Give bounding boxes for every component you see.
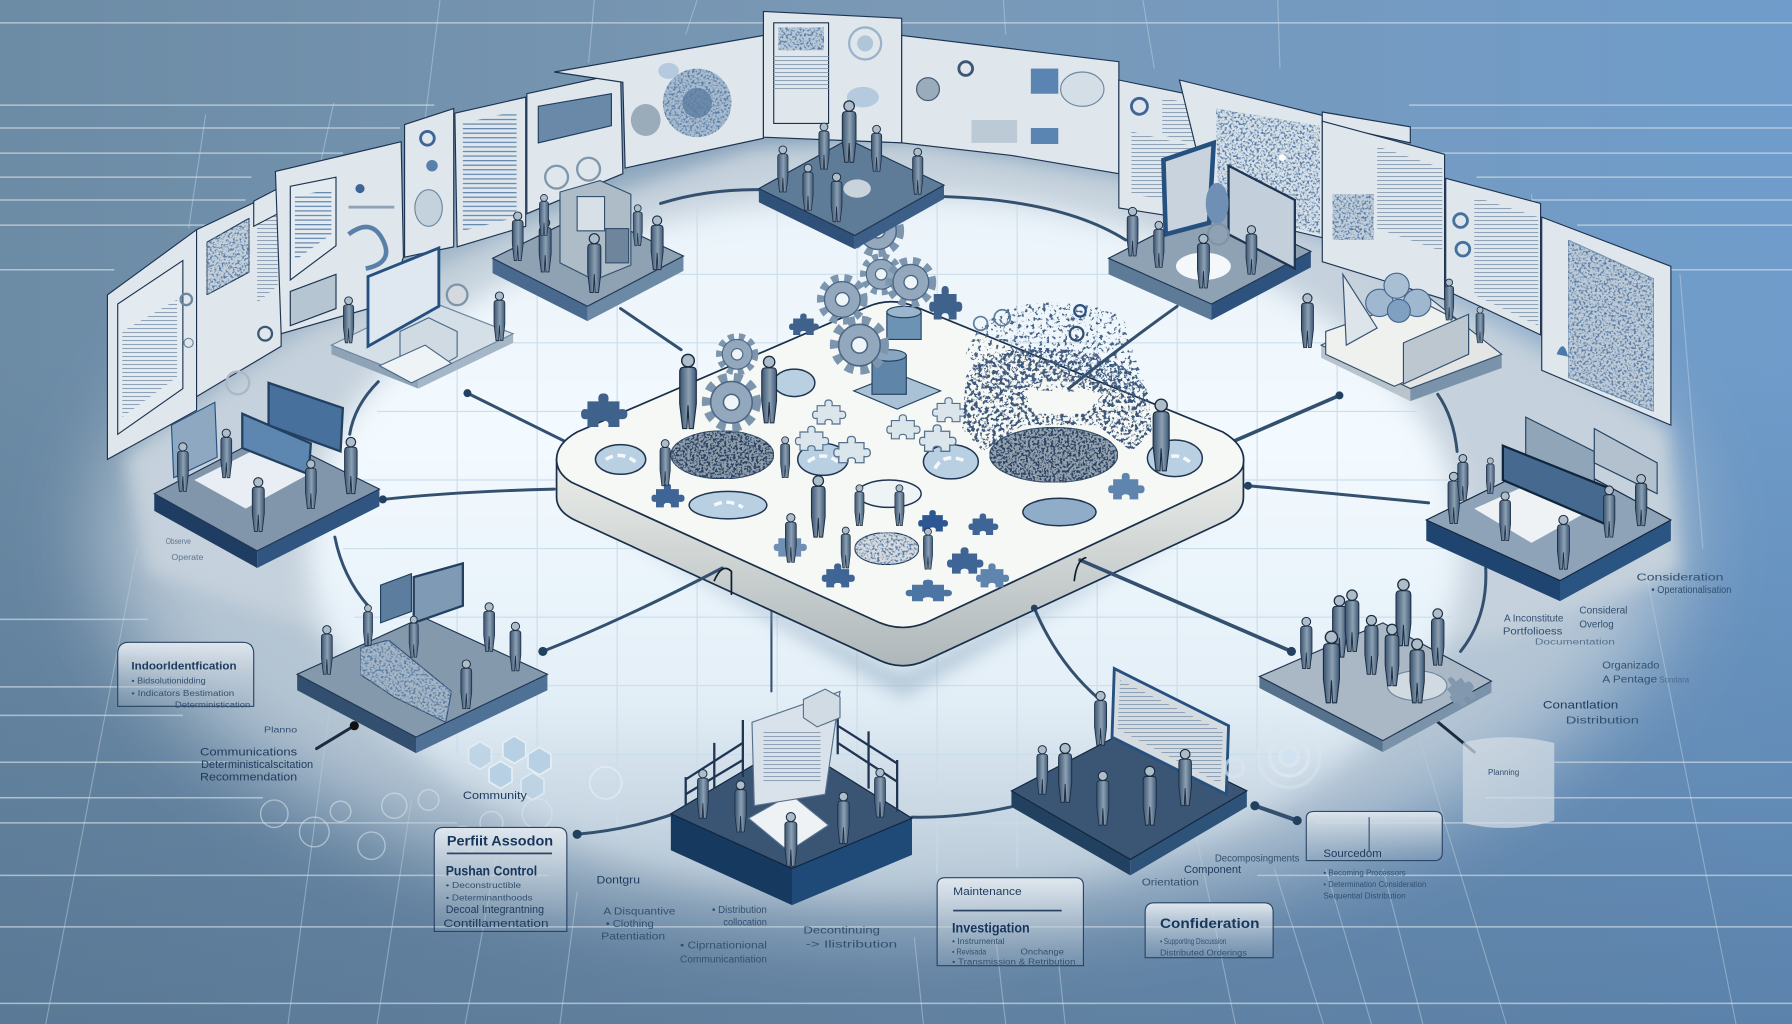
text panel: identification: Deterministication — [175, 700, 250, 709]
label: component notes — [1142, 854, 1299, 889]
label: community: Community — [463, 790, 527, 802]
text block: lower notes: • Clothing — [606, 919, 654, 930]
people on platform — [660, 354, 1169, 569]
label: observe notes: Observe — [166, 537, 191, 546]
central cylinders — [854, 306, 941, 409]
label: observe notes — [166, 537, 204, 562]
station: bottom right big screen — [1011, 669, 1247, 875]
text panel: sourcedom: • Determination Consideration — [1323, 880, 1426, 889]
white swirls inside ovals — [606, 455, 1190, 507]
text panel: perfect association: • Deconstructible — [446, 881, 522, 890]
station: lower left servers — [297, 563, 547, 753]
document: diagrams — [275, 142, 403, 334]
text block: right notes: Consideration — [1637, 573, 1724, 584]
document: notes sheet — [107, 230, 197, 459]
text panel: sourcedom: • Becoming Processors — [1323, 868, 1406, 877]
text block: right notes: Overlog — [1579, 619, 1614, 630]
icon: faint network behind lower left — [261, 790, 552, 859]
text panel: maintenance: Maintenance — [953, 886, 1022, 898]
station: top centre — [759, 101, 944, 249]
puzzle pieces on platform — [651, 473, 1145, 601]
text panel: sourcedom — [1306, 811, 1442, 900]
text block: right notes: A Pentage — [1602, 674, 1657, 685]
text block: right notes — [1503, 573, 1732, 726]
text block: lower notes: Patentiation — [601, 931, 665, 942]
document: long radial diagram — [554, 35, 763, 168]
connectors attached to platform side — [543, 306, 1291, 699]
text block: lower notes: collocation — [723, 918, 767, 929]
text panel: confideration: • Supporting Discussion — [1160, 937, 1226, 946]
text panel: perfect association: Pushan Control — [446, 863, 537, 878]
text block: lower notes: A Disquantive — [603, 906, 676, 917]
text block: right notes: Portfolioess — [1503, 626, 1562, 637]
speckled disc small — [855, 533, 919, 565]
speckled ground strip behind the floor — [126, 143, 1680, 640]
text block: right notes: Documentation — [1535, 638, 1615, 647]
label: component notes: Orientation — [1142, 878, 1199, 889]
station: right printer with spheres — [1301, 273, 1502, 401]
document: sketches — [197, 190, 281, 397]
text block: lower notes: Dontgru — [597, 874, 640, 886]
station: right monitors — [1426, 417, 1671, 601]
connectors between stations — [317, 190, 1486, 834]
outer soft haze — [103, 160, 1680, 914]
text panel: perfect association: Perfiit Assodon — [447, 834, 553, 849]
text block: communications: Communications — [200, 746, 297, 758]
station: top right tablet and monitor — [1109, 143, 1311, 320]
text panel: perfect association — [434, 827, 567, 931]
pale puzzle ring at centre — [795, 398, 966, 463]
speckled disc left — [671, 431, 774, 479]
pale circular floor — [309, 194, 1463, 898]
text block: communications: Deterministicalscitation — [201, 759, 313, 771]
callout: planning cup: Planning — [1488, 768, 1519, 777]
station: right lower crowd — [1259, 579, 1491, 752]
text panel: maintenance: Onchange — [1021, 947, 1065, 956]
text panel: confideration: Confideration — [1160, 916, 1259, 931]
text block: lower notes — [597, 874, 898, 965]
text block: right notes: Distribution — [1566, 715, 1639, 726]
central platform shadow — [571, 503, 1234, 697]
text block: lower notes: Decontinuing — [803, 926, 880, 937]
label: component notes: Decomposingments — [1215, 854, 1299, 865]
text panel: confideration: Distributed Orderings — [1160, 948, 1247, 957]
document: back sheet right — [1322, 112, 1410, 143]
connector end dots — [350, 389, 1343, 839]
floor grid — [331, 189, 1463, 874]
text block: communications: Planno — [264, 726, 298, 735]
document: icon column — [405, 109, 454, 257]
text panel: identification: • Bidsolutionidding — [131, 676, 206, 685]
text block: lower notes: -> Ilistribution — [806, 939, 898, 950]
text panel: identification: Indoorldentfication — [131, 661, 237, 673]
speckled disc right — [990, 427, 1118, 482]
text block: lower notes: Communicantiation — [680, 954, 767, 965]
blue map ovals — [595, 369, 1202, 526]
text block: right notes: Sondara — [1659, 675, 1690, 684]
text panel: confideration — [1145, 903, 1273, 958]
text panel: identification: • Indicators Bestimation — [131, 689, 234, 698]
document: text and circle — [1119, 80, 1214, 229]
gears above platform — [707, 209, 931, 426]
text block: communications: Recommendation — [200, 772, 297, 784]
document: cloud and blocks — [902, 35, 1119, 174]
document: network map — [1179, 80, 1322, 238]
text panel: sourcedom: Sequential Distribution — [1323, 891, 1406, 900]
document: striped text sheet — [455, 97, 526, 247]
document: back sheet — [254, 158, 337, 226]
text block: lower notes: • Distribution — [712, 905, 767, 916]
dots of platform connectors — [538, 605, 1296, 656]
text block: right notes: • Operationalisation — [1651, 585, 1732, 596]
text block: right notes: Organizado — [1602, 661, 1660, 672]
document: data grid — [1542, 217, 1671, 425]
station: bottom centre chart and railing — [671, 689, 912, 905]
text panel: maintenance — [937, 878, 1083, 967]
text block: right notes: A Inconstitute — [1504, 614, 1564, 625]
text panel: maintenance: Investigation — [952, 921, 1030, 936]
station: left pale monitor — [331, 248, 513, 389]
station: left monitors — [154, 371, 379, 568]
text panel: perfect association: Decoal Integrantning — [446, 904, 544, 916]
document: three-panel chart — [763, 11, 902, 143]
station: top left people with boxes — [493, 181, 683, 321]
text block: communications — [200, 726, 313, 784]
text block: right notes: Conantlation — [1543, 700, 1618, 712]
callout: planning cup — [1463, 737, 1554, 828]
document: dashboard sheet — [527, 73, 623, 214]
text panel: maintenance: • Revisada — [952, 947, 987, 956]
text block: lower notes: • Ciprnationional — [680, 941, 767, 952]
paper wall of documents — [107, 11, 1671, 459]
icon: target rings — [1225, 726, 1320, 787]
text panel: maintenance: • Transmission & Retribution — [952, 958, 1075, 967]
document: rings and text — [1446, 178, 1541, 335]
icon: hexagon cluster — [469, 736, 622, 800]
text panel: maintenance: • Instrumental — [952, 937, 1005, 946]
text panel: perfect association: Contillamentation — [443, 918, 549, 930]
swarm of small particles — [962, 303, 1152, 451]
floating puzzle pieces — [581, 286, 962, 427]
text panel: identification — [118, 642, 254, 709]
document: data sheet — [1322, 121, 1445, 299]
text panel: sourcedom: Sourcedom — [1323, 848, 1382, 860]
text panel: perfect association: • Determinanthoods — [446, 894, 533, 903]
text block: right notes: Consideral — [1579, 606, 1627, 617]
central platform — [557, 209, 1244, 666]
label: component notes: Component — [1184, 864, 1242, 876]
label: observe notes: Operate — [171, 553, 204, 562]
